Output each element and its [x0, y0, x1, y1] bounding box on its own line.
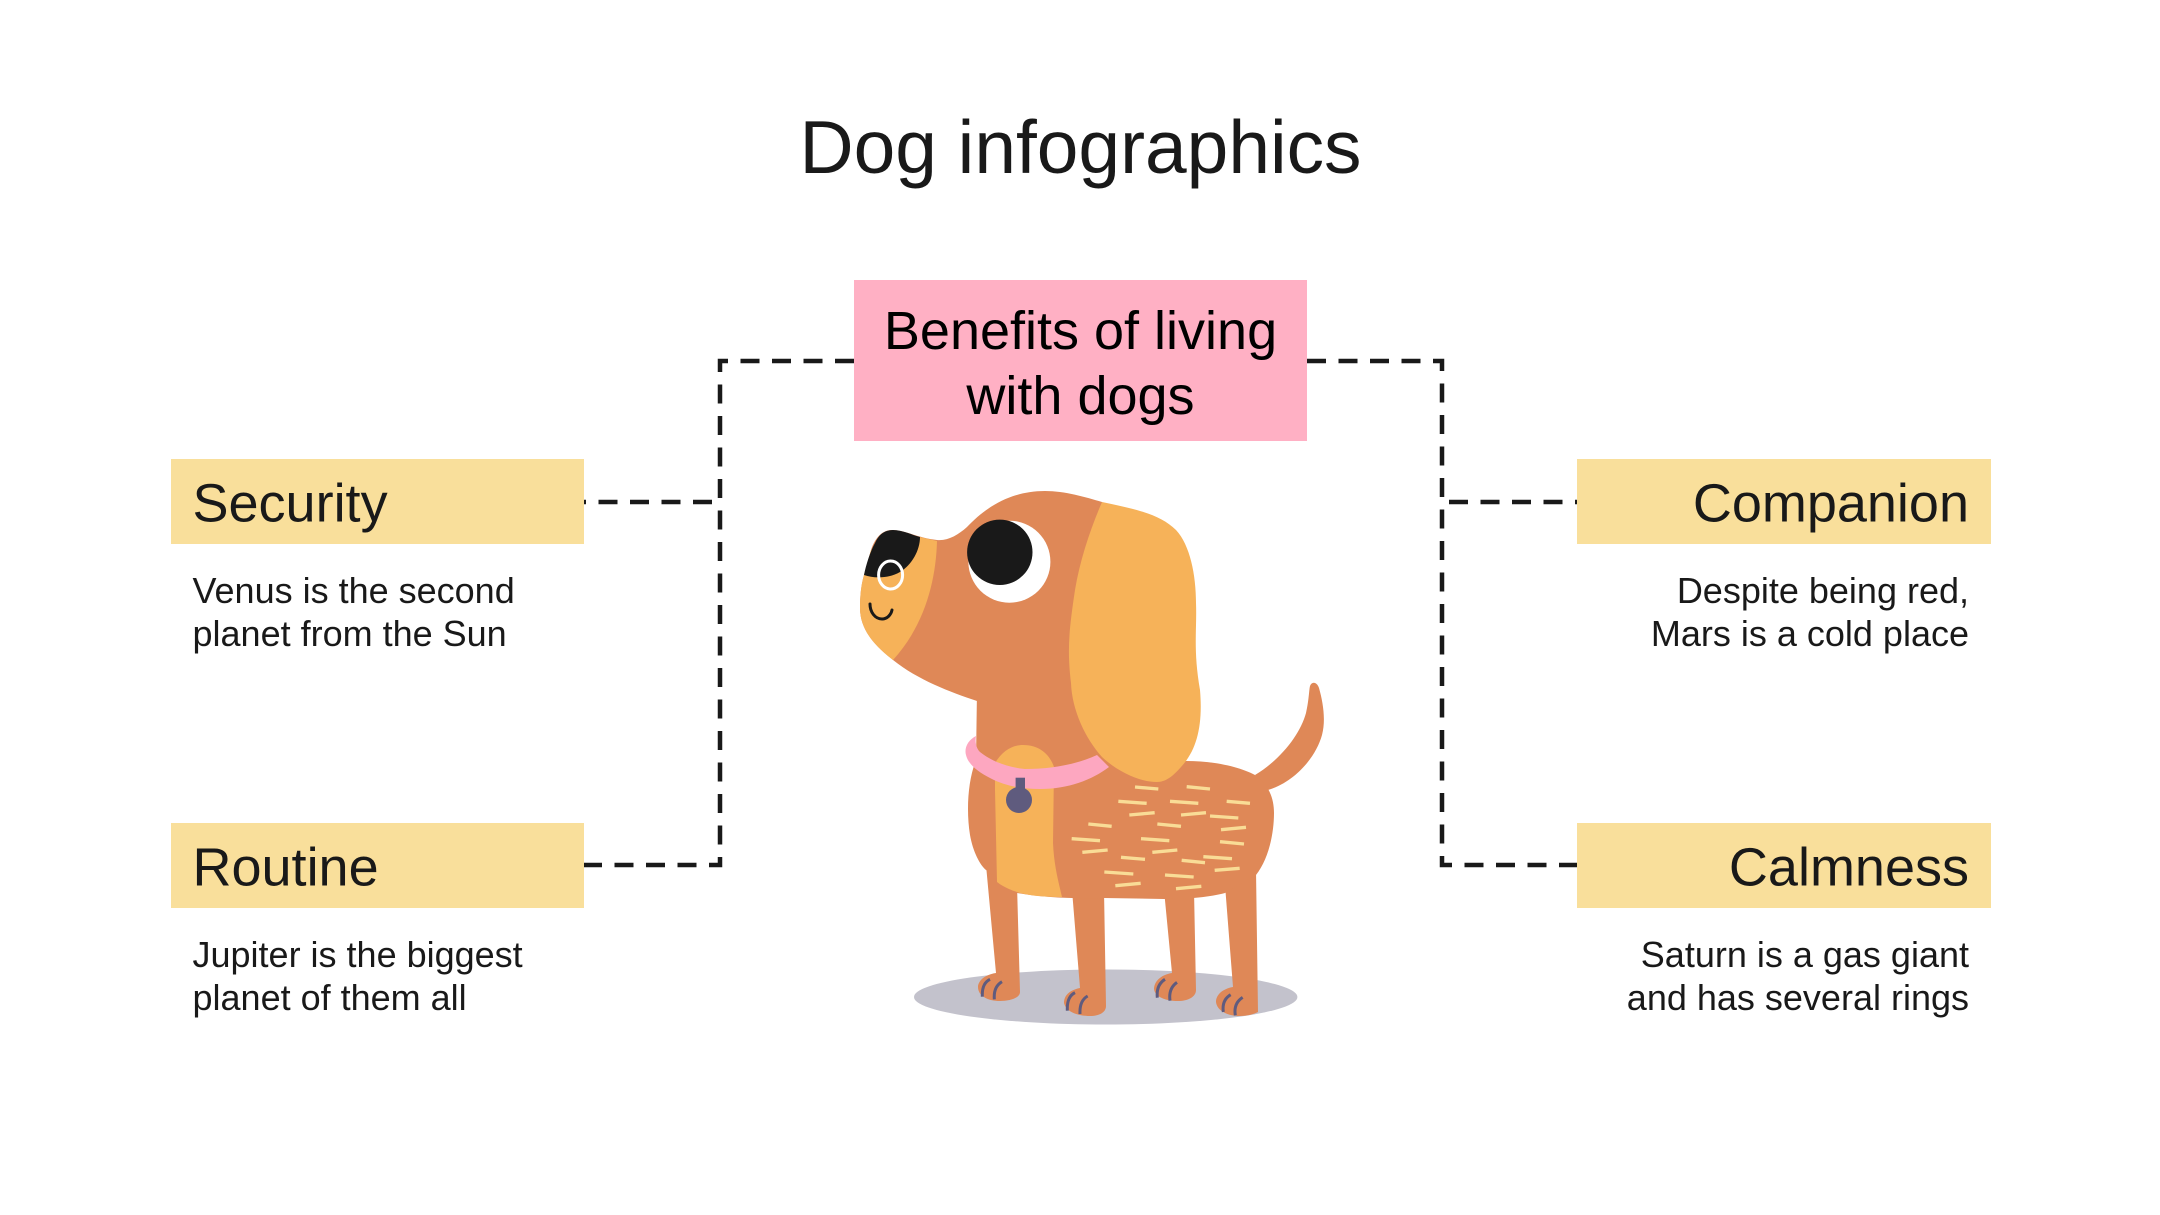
fur stripes: [1072, 787, 1250, 889]
panel: security: planet from the Sun: [192, 613, 507, 654]
panel: routine: [171, 823, 584, 1018]
chest patch: [995, 745, 1062, 897]
collar: [965, 736, 1109, 789]
panel: routine: planet of them all: [192, 977, 467, 1018]
nose: [864, 530, 920, 577]
ear: [1069, 502, 1201, 782]
connector: centre box to right items: [1307, 361, 1577, 865]
legs: [978, 865, 1258, 1016]
panel: routine: Routine: [192, 838, 379, 898]
panel: companion: Despite being red,: [1677, 570, 1969, 611]
torso: [968, 690, 1274, 899]
panel: calmness: Saturn is a gas giant: [1641, 934, 1969, 975]
panel: calmness: [1577, 823, 1991, 1018]
panel: security: [171, 459, 584, 654]
panel: companion: Companion: [1693, 474, 1969, 534]
panel: calmness: and has several rings: [1627, 977, 1969, 1018]
panel: companion: Mars is a cold place: [1651, 613, 1969, 654]
central heading box: [854, 280, 1307, 441]
collar tag: [1006, 778, 1032, 813]
ground shadow: [914, 970, 1297, 1024]
title: Dog infographics: [799, 105, 1362, 189]
claws: [982, 979, 1243, 1015]
snout: [860, 537, 937, 660]
panel: security: Venus is the second: [192, 570, 515, 611]
head: [860, 491, 1105, 701]
central heading box: with dogs: [965, 366, 1195, 426]
tail: [1255, 683, 1324, 790]
connector: centre box to left items: [584, 361, 854, 865]
illustration: dog: [860, 491, 1324, 1024]
panel: routine: Jupiter is the biggest: [192, 934, 523, 975]
eye: [967, 520, 1050, 603]
panel: security: Security: [192, 474, 388, 534]
mouth: [870, 604, 892, 619]
nostril ring: [879, 561, 903, 589]
panel: companion: [1577, 459, 1991, 654]
panel: calmness: Calmness: [1729, 838, 1969, 898]
central heading box: Benefits of living: [884, 301, 1277, 361]
